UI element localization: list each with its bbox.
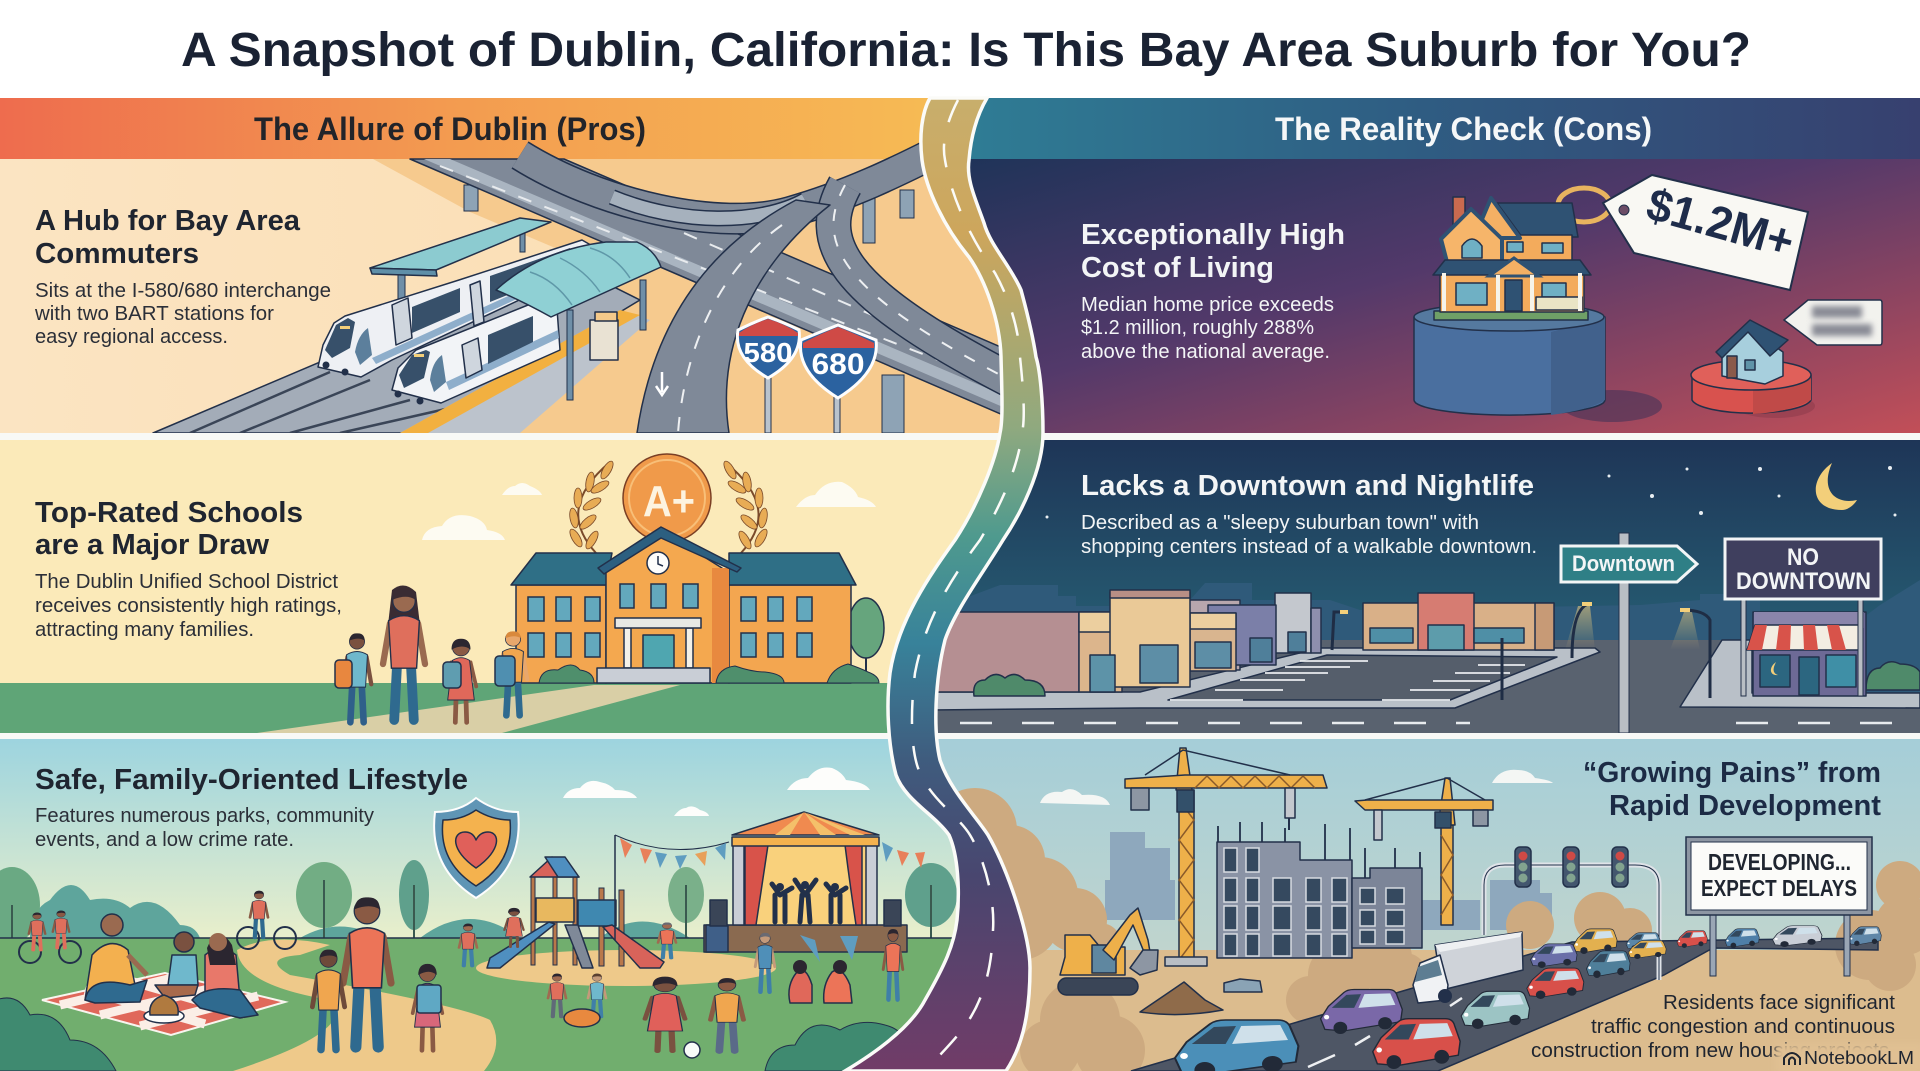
boy with backpack bbox=[495, 631, 527, 716]
text: schools: The Dublin Unified School District bbox=[35, 571, 338, 593]
father and two children walking bbox=[312, 897, 442, 1050]
supply crate bbox=[1224, 979, 1262, 992]
children playing soccer bbox=[645, 977, 744, 1058]
park trees bbox=[0, 860, 957, 945]
text: commuter hub: with two BART stations for bbox=[34, 303, 274, 325]
platform shelter bbox=[590, 312, 618, 360]
flyover ramps bbox=[520, 155, 1010, 380]
sign: I-580 shield: 580 bbox=[744, 337, 792, 368]
highway: main diagonal bbox=[410, 159, 1010, 418]
building under construction bbox=[1217, 822, 1422, 958]
foreground bushes bbox=[0, 998, 910, 1071]
father sitting bbox=[85, 914, 147, 1003]
sidewalks and parking lot bbox=[930, 640, 1920, 710]
cyclists left bbox=[19, 911, 81, 963]
shrubs bbox=[539, 664, 879, 683]
heading: commuter hub: A Hub for Bay Area bbox=[35, 205, 301, 237]
traffic signal gantry bbox=[1484, 847, 1659, 980]
distant hills bbox=[30, 885, 690, 938]
walkway bbox=[257, 685, 680, 733]
heading: cost of living bbox=[1081, 219, 1345, 284]
heading: growing pains: “Growing Pains” from bbox=[1583, 757, 1881, 789]
header band: cons bbox=[930, 98, 1920, 159]
clouds bbox=[1040, 770, 1553, 805]
skyline silhouette bbox=[930, 580, 1920, 700]
text: lifestyle: events, and a low crime rate. bbox=[35, 829, 294, 851]
panel: growing pains bbox=[930, 739, 1920, 1071]
sign: NO DOWNTOWN: NO bbox=[1787, 544, 1819, 571]
text: schools bbox=[35, 571, 342, 641]
lane dashes bbox=[1308, 998, 1462, 1067]
crane: small bbox=[1355, 778, 1493, 925]
text: growing pains: Residents face significant bbox=[1663, 992, 1895, 1014]
icon: laurel wreath left bbox=[568, 459, 615, 553]
text: commuter hub: Sits at the I-580/680 interchange bbox=[35, 280, 331, 302]
spectators near stage bbox=[755, 929, 903, 1003]
icon: A+ medal bbox=[623, 454, 711, 542]
text: lacks a downtown bbox=[1081, 512, 1537, 558]
road with traffic bbox=[1131, 938, 1878, 1071]
train: rear bbox=[318, 240, 600, 377]
text: lifestyle bbox=[35, 805, 374, 851]
icon: laurel wreath right bbox=[722, 459, 769, 553]
text: growing pains: construction from new housing projects. bbox=[1531, 1040, 1895, 1062]
school building bbox=[511, 527, 856, 683]
store under NO DOWNTOWN sign bbox=[1747, 612, 1866, 696]
mother sitting bbox=[192, 933, 258, 1018]
icon: crescent moon bbox=[1816, 463, 1857, 510]
central winding road divider bbox=[845, 98, 1043, 1071]
cyclist on path bbox=[237, 891, 296, 949]
right column: cons bbox=[930, 98, 1920, 1071]
ground bbox=[930, 640, 1920, 733]
text: cost of living: above the national average. bbox=[1081, 341, 1330, 363]
icon: large price tag $1.2M+ bbox=[1603, 175, 1808, 290]
sign: I-580 shield bbox=[737, 317, 799, 433]
canopy: rear bbox=[369, 217, 552, 299]
shrub by store bbox=[1866, 662, 1920, 690]
playground structure bbox=[487, 835, 664, 968]
text: lifestyle: Features numerous parks, community bbox=[35, 805, 374, 827]
gaps between panels bbox=[0, 433, 1920, 739]
text: cost of living: Median home price exceeds bbox=[1081, 294, 1334, 316]
icon: safety shield with heart bbox=[434, 798, 519, 898]
child sitting bbox=[155, 932, 198, 998]
text: schools: receives consistently high ratings, bbox=[35, 595, 342, 617]
text: cost of living: $1.2 million, roughly 288% bbox=[1081, 317, 1314, 339]
panel: family lifestyle bbox=[0, 739, 1010, 1071]
girl with backpack bbox=[443, 639, 476, 722]
signpost: Downtown: Downtown bbox=[1572, 551, 1675, 576]
panel: no downtown or nightlife bbox=[930, 440, 1920, 733]
text: lacks a downtown: shopping centers instead of a walkable downtown. bbox=[1081, 536, 1537, 558]
signpost: Downtown bbox=[1561, 533, 1697, 733]
dirt pile bbox=[1140, 982, 1223, 1015]
platform bbox=[400, 310, 650, 433]
sand ground bbox=[930, 950, 1920, 1071]
grass bbox=[0, 683, 888, 733]
sign: I-680 shield bbox=[800, 325, 876, 433]
shopping center right bbox=[1363, 593, 1554, 650]
heading: growing pains bbox=[1583, 757, 1881, 822]
NotebookLM watermark bbox=[1775, 1043, 1920, 1071]
clouds bbox=[563, 767, 870, 816]
grass field bbox=[0, 938, 1010, 1071]
title: A Snapshot of Dublin, California: Is This Bay Area Suburb for You? bbox=[181, 24, 1751, 77]
delivery truck bbox=[1413, 932, 1523, 1003]
left column: pros bbox=[0, 98, 1010, 1071]
children at playground bbox=[459, 908, 676, 1027]
text: commuter hub bbox=[34, 280, 331, 348]
picnic food bbox=[144, 995, 184, 1023]
background buildings bbox=[1105, 832, 1552, 933]
picnic family bbox=[85, 914, 258, 1023]
text: lacks a downtown: Described as a "sleepy suburban town" with bbox=[1081, 512, 1479, 534]
festival stage bbox=[704, 812, 907, 952]
panel: high cost of living bbox=[930, 159, 1920, 433]
icon: large price tag $1.2M+: $1.2M+ bbox=[1641, 178, 1800, 268]
bunting flags bbox=[615, 835, 925, 962]
heading: cost of living: Cost of Living bbox=[1081, 252, 1274, 284]
highway support pillars bbox=[464, 185, 914, 433]
clouds bbox=[422, 482, 876, 540]
heading: lifestyle: Safe, Family-Oriented Lifestyle bbox=[35, 764, 468, 796]
child left with backpack bbox=[335, 633, 371, 722]
stage performers bbox=[772, 880, 846, 922]
text: commuter hub: easy regional access. bbox=[35, 326, 228, 348]
dust clouds bbox=[933, 788, 1920, 1071]
heading: commuter hub bbox=[36, 209, 300, 264]
parking stall lines bbox=[1170, 661, 1525, 700]
icon: A+ medal: A+ bbox=[643, 477, 695, 526]
picnic blanket bbox=[42, 973, 285, 1035]
strip mall buildings left bbox=[930, 590, 1321, 692]
stars bbox=[1046, 466, 1896, 518]
sign: NO DOWNTOWN: DOWNTOWN bbox=[1736, 568, 1871, 595]
heading: lacks a downtown: Lacks a Downtown and Nightlife bbox=[1081, 470, 1534, 502]
heading: schools: Top-Rated Schools bbox=[35, 497, 303, 529]
header band: pros: The Allure of Dublin (Pros) bbox=[254, 111, 646, 147]
text: cost of living bbox=[1081, 294, 1334, 363]
street lamps bbox=[1332, 602, 1710, 700]
excavator bbox=[1058, 908, 1158, 995]
tree beside school bbox=[852, 597, 885, 671]
sign: I-680 shield: 680 bbox=[812, 348, 864, 381]
panel: commuter hub bbox=[0, 155, 1010, 433]
text: growing pains: traffic congestion and continuous bbox=[1591, 1016, 1895, 1038]
header band: cons: The Reality Check (Cons) bbox=[1275, 111, 1652, 147]
heading: schools: are a Major Draw bbox=[35, 529, 269, 561]
canopy: front bbox=[496, 242, 661, 400]
train: front bbox=[392, 295, 560, 404]
mother bbox=[383, 585, 425, 720]
text: schools: attracting many families. bbox=[35, 619, 254, 641]
highway: ramp going down with arrow bbox=[637, 200, 830, 433]
NotebookLM watermark: NotebookLM bbox=[1804, 1048, 1914, 1068]
heading: cost of living: Exceptionally High bbox=[1081, 219, 1345, 251]
billboard: developing, expect delays bbox=[1686, 837, 1872, 976]
shadow area under interchange bbox=[373, 159, 1010, 433]
heading: commuter hub: Commuters bbox=[35, 238, 199, 270]
billboard: developing, expect delays: DEVELOPING... bbox=[1708, 849, 1851, 875]
playground sand bbox=[476, 950, 776, 986]
sign: NO DOWNTOWN bbox=[1725, 539, 1881, 696]
billboard: developing, expect delays: EXPECT DELAYS bbox=[1701, 875, 1857, 901]
rail tracks bbox=[152, 288, 640, 433]
icon: price tag ring bbox=[1558, 188, 1610, 222]
cars in traffic bbox=[1175, 926, 1881, 1071]
heading: growing pains: Rapid Development bbox=[1609, 790, 1881, 822]
crane: large bbox=[1125, 748, 1327, 966]
sand path bbox=[233, 940, 496, 1071]
text: growing pains bbox=[1531, 992, 1895, 1062]
icon: large house on tall pedestal bbox=[1414, 197, 1662, 422]
heading: schools bbox=[35, 497, 303, 561]
family walking to school bbox=[335, 585, 527, 722]
icon: small house on low pedestal with blurred tag bbox=[1691, 300, 1882, 418]
header band: pros bbox=[0, 98, 1000, 159]
shrub bbox=[974, 674, 1045, 696]
road lane dashes bbox=[960, 722, 1900, 724]
panel: top-rated schools bbox=[0, 440, 1010, 733]
